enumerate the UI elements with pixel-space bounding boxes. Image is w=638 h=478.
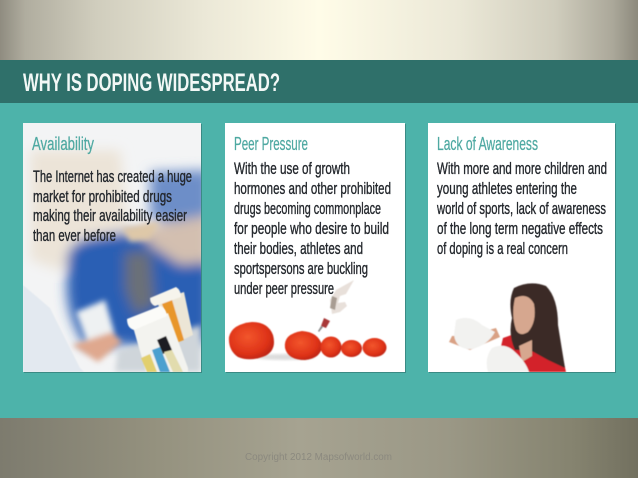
text block: peer pressure: [234, 159, 391, 298]
top background band: [0, 0, 638, 60]
text block: lack of awareness: [436, 159, 607, 258]
title band: [0, 60, 638, 103]
icon: tomatoes: [229, 322, 386, 360]
panel: lack of awareness: [428, 123, 616, 373]
heading: peer pressure: Peer Pressure: [234, 134, 308, 154]
text block: peer pressure: With the use of growth: [234, 159, 350, 178]
bottom background band: [0, 418, 638, 478]
icon: laptop corner: [23, 285, 84, 372]
text block: peer pressure: hormones and other prohibited: [234, 179, 391, 198]
text block: lack of awareness: of doping is a real concern: [437, 239, 568, 258]
heading: lack of awareness: Lack of Awareness: [437, 134, 538, 154]
icon: girl with boxing gloves: [449, 283, 566, 372]
text block: peer pressure: for people who desire to build: [234, 219, 389, 238]
text block: availability: market for prohibited drugs: [33, 187, 172, 206]
text block: peer pressure: sportspersons are buckling: [234, 259, 368, 278]
text block: peer pressure: their bodies, athletes and: [234, 239, 363, 258]
text block: availability: [33, 167, 192, 245]
title: WHY IS DOPING WIDESPREAD?: [23, 69, 280, 97]
icon: orange pill bottle: [150, 287, 193, 345]
icon: white pill bottle with label: [127, 306, 188, 372]
icon: hand with syringe: [318, 280, 354, 332]
photo: medicine bottles and blurred person: [23, 123, 210, 372]
panel: peer pressure: [225, 123, 406, 373]
heading: availability: Availability: [32, 134, 94, 154]
teal content background: [0, 103, 638, 418]
text block: lack of awareness: young athletes entering the: [437, 179, 577, 198]
panel: availability: [23, 123, 210, 373]
copyright footer: Copyright 2012 Mapsofworld.com: [245, 452, 392, 463]
text block: peer pressure: drugs becoming commonplace: [234, 199, 381, 218]
text block: availability: making their availability easier: [33, 206, 187, 225]
text block: availability: The Internet has created a huge: [33, 167, 192, 186]
text block: availability: than ever before: [33, 226, 116, 245]
text block: peer pressure: under peer pressure: [234, 279, 334, 298]
